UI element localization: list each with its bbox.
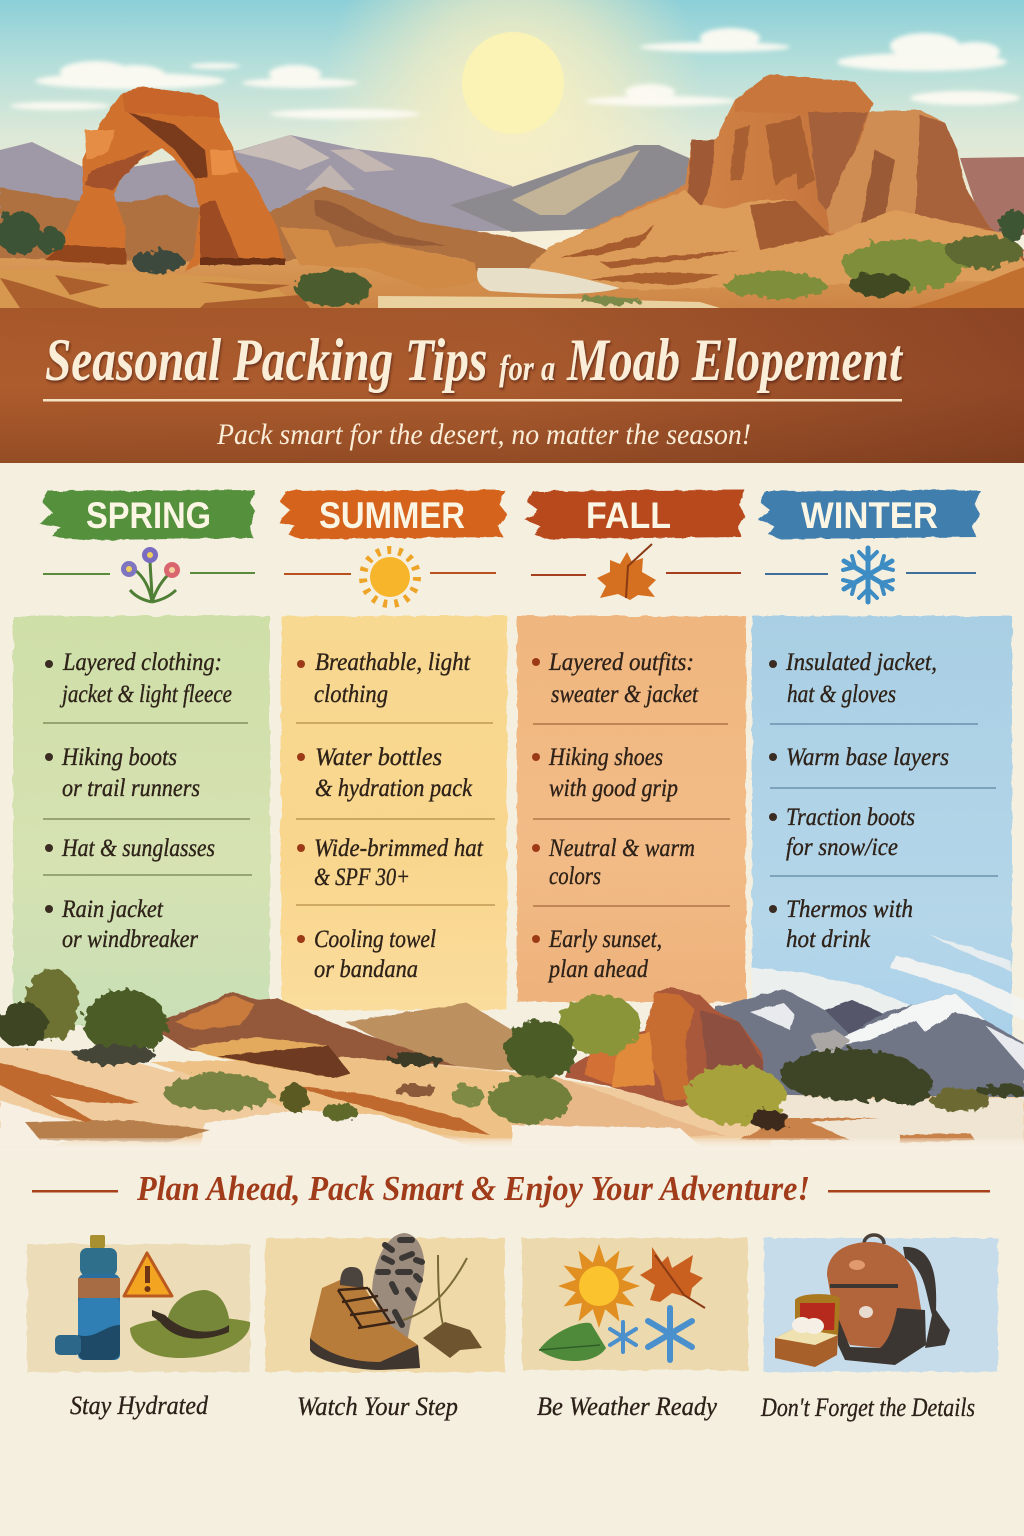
bullet list: fall: plan ahead: [547, 956, 648, 983]
bullet list: winter: [769, 649, 998, 953]
tan far hill: [345, 1003, 530, 1070]
shrubs: [0, 209, 1024, 306]
season header: winter: [758, 490, 980, 539]
bullet list: summer: Breathable, light: [315, 649, 471, 676]
icon: hiking boot: [310, 1267, 420, 1370]
ledges: [280, 227, 478, 290]
low mesa: [188, 1037, 350, 1078]
foreground ground: [0, 243, 1024, 310]
bullet list: spring: Layered clothing:: [62, 649, 222, 676]
soft bottom fade: [0, 1140, 1024, 1158]
icon: hat: [130, 1290, 250, 1358]
clouds: [10, 28, 1020, 119]
bullet list: summer: Wide-brimmed hat: [314, 835, 484, 862]
title: Seasonal Packing Tips for a Moab Elopement: [45, 327, 904, 393]
season header: fall: [525, 490, 745, 539]
icon: summer sun: [284, 550, 496, 604]
icon: keepsake box: [775, 1294, 840, 1367]
lower landscape: [0, 970, 1024, 1158]
icon: winter snowflake: [765, 548, 976, 602]
snow clouds: [752, 935, 1024, 1030]
right sand hill: [512, 1077, 725, 1140]
season header: summer: [278, 490, 507, 539]
closing heading: Plan Ahead, Pack Smart & Enjoy Your Adventure!: [136, 1169, 810, 1208]
bullet list: spring: or windbreaker: [62, 926, 198, 953]
panel: summer: [281, 616, 507, 1010]
icon: green leaf: [539, 1323, 606, 1361]
card: stay hydrated: [27, 1235, 250, 1372]
rock tower: [565, 987, 765, 1107]
bullet list: winter: hat & gloves: [787, 681, 896, 708]
sky: [0, 0, 1024, 210]
trees and shrubs: [0, 970, 1024, 1130]
card: watch your step: [265, 1233, 505, 1372]
delicate arch: [45, 87, 285, 272]
bullet list: spring: Rain jacket: [61, 896, 164, 923]
bullet list: summer: clothing: [314, 681, 388, 708]
bullet list: fall: colors: [549, 863, 601, 890]
bullet list: summer: [296, 649, 495, 983]
bullet list: fall: Neutral & warm: [548, 835, 695, 862]
grey mesa mountain: [450, 145, 700, 232]
subtitle: Pack smart for the desert, no matter the season!: [216, 418, 751, 451]
icon: maple leaf: [640, 1247, 705, 1308]
base sand: [0, 1048, 1024, 1146]
icon: spring flowers: [43, 547, 255, 602]
rust strokes: [0, 1063, 975, 1143]
hero desert landscape: [0, 0, 1024, 310]
icon: boot sole: [372, 1233, 424, 1338]
season header: spring: [40, 490, 256, 540]
snowy ground: [770, 1095, 1024, 1146]
card: don't forget the details: [764, 1235, 998, 1372]
bullet list: fall: Hiking shoes: [548, 744, 663, 771]
bullet list: fall: with good grip: [549, 775, 678, 802]
bullet list: winter: for snow/ice: [786, 834, 898, 861]
icon: backpack: [827, 1235, 950, 1365]
panel: winter: [752, 616, 1024, 1056]
label: be weather ready: Be Weather Ready: [537, 1392, 717, 1421]
panel: spring: [13, 616, 270, 1026]
foreground mound: [909, 267, 1024, 308]
bullet list: summer: Water bottles: [315, 744, 442, 771]
icon: fall leaf: [531, 544, 741, 600]
bullet list: summer: & SPF 30+: [314, 864, 410, 891]
icon: warning sign: [124, 1253, 172, 1296]
title underline: [43, 399, 902, 402]
label: stay hydrated: Stay Hydrated: [70, 1391, 209, 1420]
card: be weather ready: [522, 1238, 748, 1370]
far mountains: [0, 135, 540, 240]
far right cliff: [960, 157, 1024, 235]
bullet list: winter: Thermos with: [786, 896, 913, 923]
label: don't forget the details: Don't Forget the Details: [760, 1393, 975, 1422]
pale sand: [0, 1100, 700, 1146]
bullet list: spring: Hiking boots: [61, 744, 177, 771]
sun: [323, 0, 703, 280]
panel: fall: [517, 616, 746, 1002]
bullet list: fall: sweater & jacket: [551, 681, 699, 708]
bullet list: spring: Hat & sunglasses: [61, 835, 215, 862]
bullet list: winter: Insulated jacket,: [785, 649, 937, 676]
bullet list: spring: [43, 649, 252, 953]
title banner: [0, 308, 1024, 463]
icon: snowflakes: [610, 1308, 692, 1360]
bullet list: winter: Warm base layers: [786, 744, 949, 771]
bullet list: winter: hot drink: [786, 926, 871, 953]
red hill: [148, 992, 460, 1067]
bullet list: spring: or trail runners: [62, 775, 200, 802]
red hills: [0, 186, 580, 275]
right buttes: [529, 74, 1024, 305]
bullet list: fall: Early sunset,: [548, 926, 662, 953]
bullet list: fall: Layered outfits:: [548, 649, 694, 676]
bullet list: summer: & hydration pack: [315, 775, 473, 802]
river: [477, 268, 620, 294]
icon: water bottle: [55, 1235, 120, 1360]
label: watch your step: Watch Your Step: [297, 1392, 458, 1421]
season header: spring: SPRING: [86, 495, 211, 536]
bullet list: summer: or bandana: [314, 956, 418, 983]
season header: fall: FALL: [586, 495, 671, 536]
icon: twig and leaves: [403, 1255, 482, 1358]
bullet list: spring: jacket & light fleece: [59, 681, 232, 708]
bullet list: fall: [532, 649, 730, 983]
bullet list: winter: Traction boots: [786, 804, 915, 831]
icon: sun: [558, 1244, 640, 1328]
mid sand: [150, 1057, 725, 1140]
season header: summer: SUMMER: [319, 495, 465, 536]
bullet list: summer: Cooling towel: [314, 926, 436, 953]
snowy mountains: [715, 989, 1024, 1100]
season header: winter: WINTER: [801, 495, 938, 536]
